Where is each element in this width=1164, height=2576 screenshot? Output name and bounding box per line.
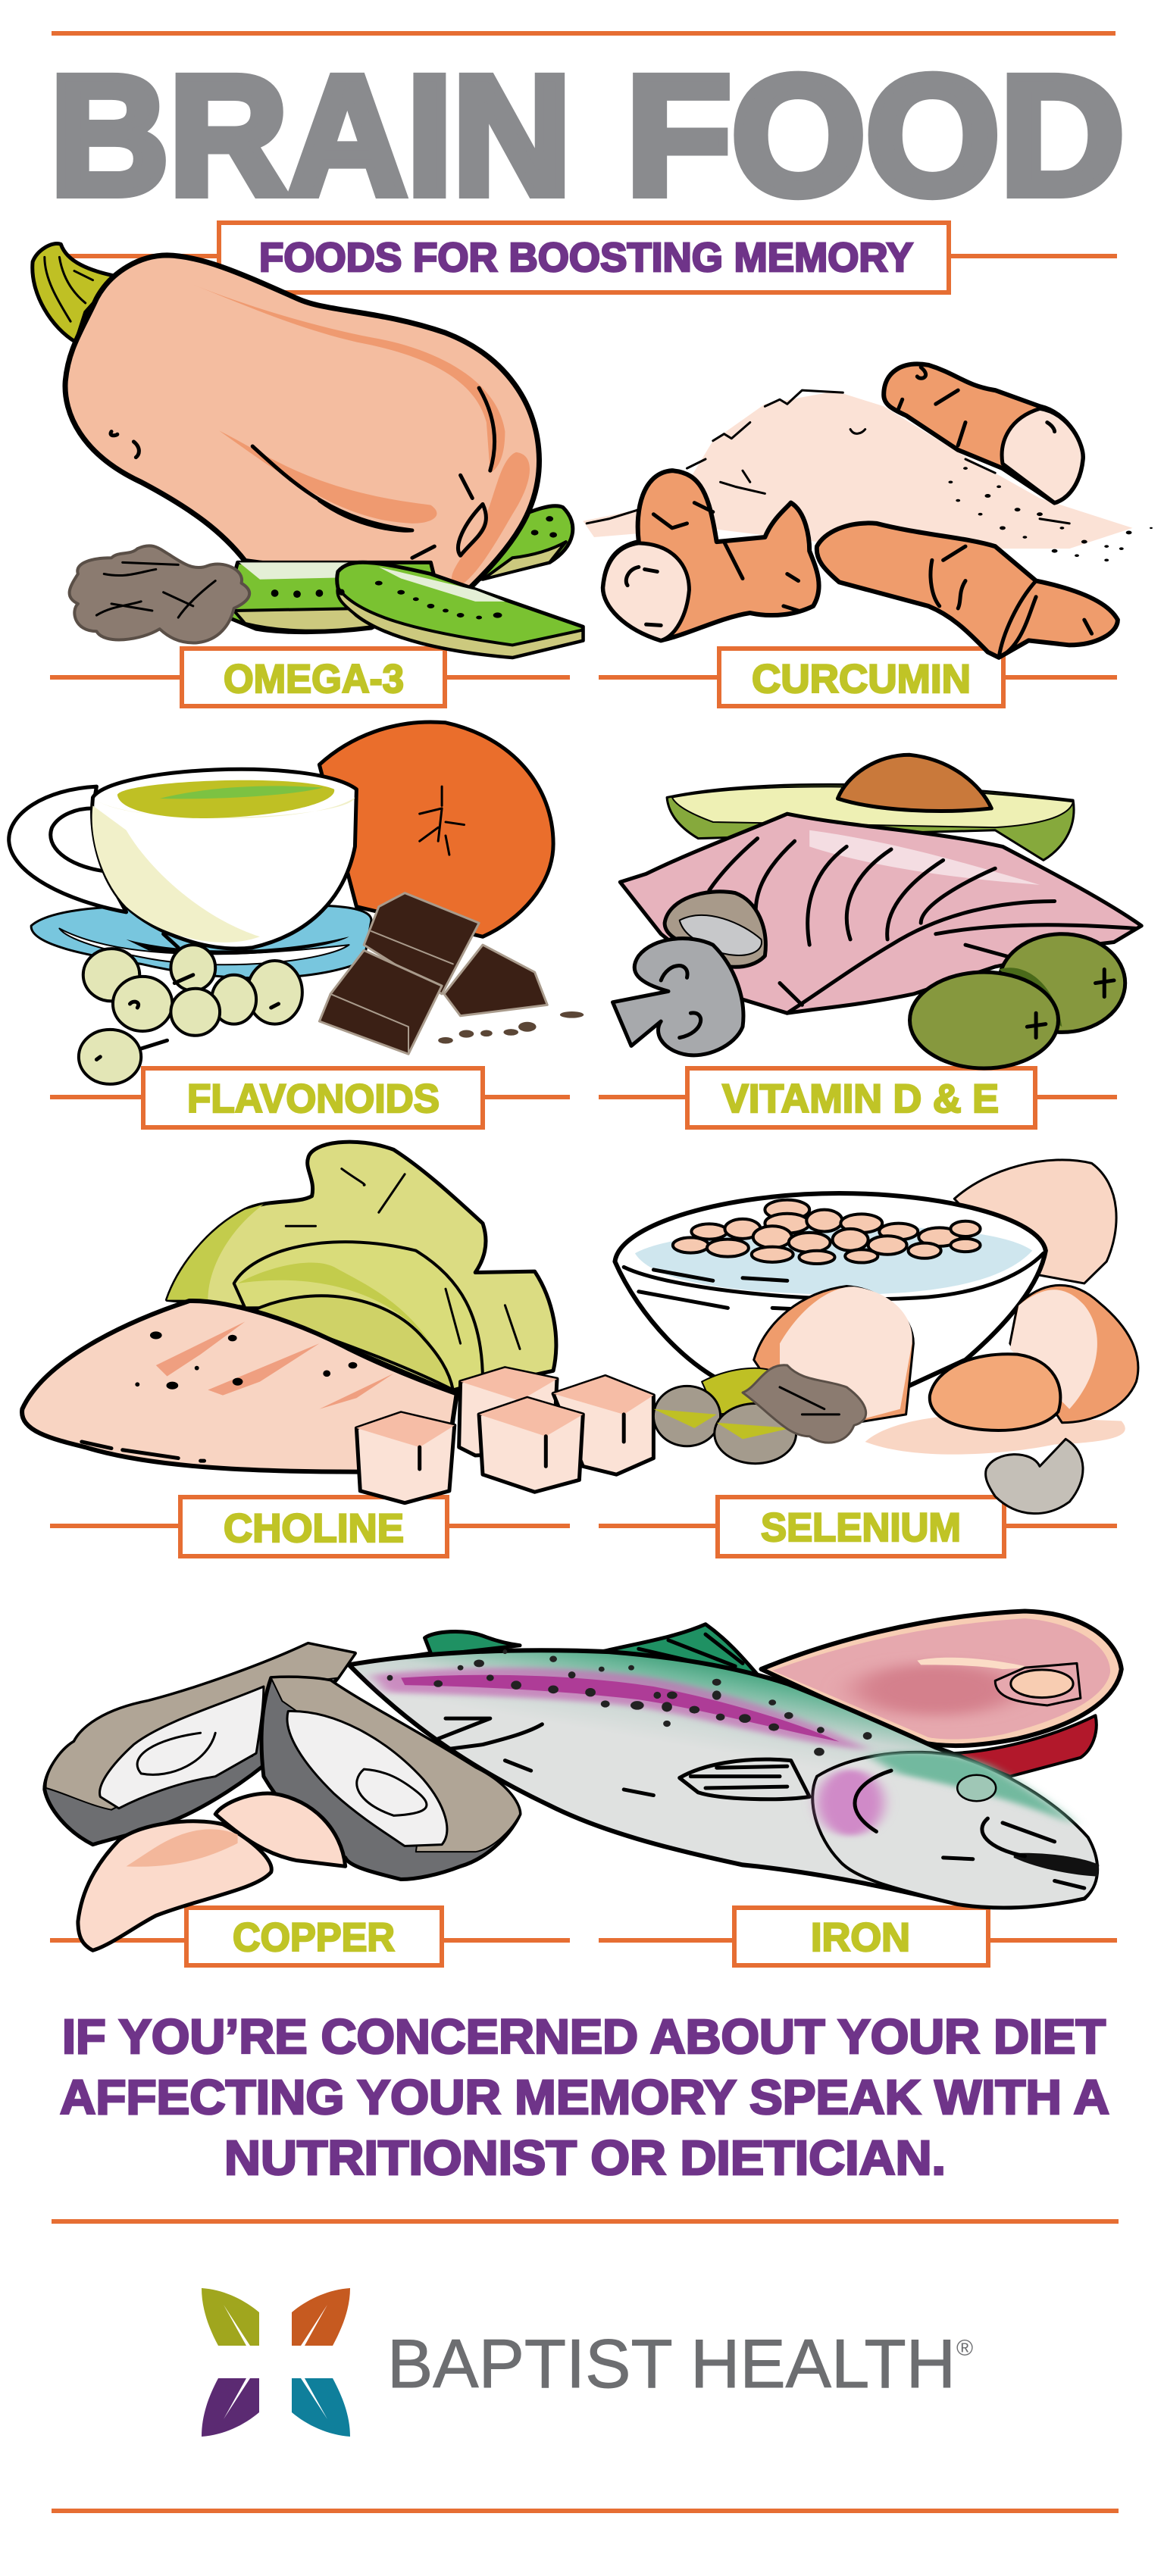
icon: avocado xyxy=(667,784,1074,860)
title: FOOD xyxy=(626,41,1125,230)
crumbs xyxy=(438,1011,584,1044)
icon: saucer xyxy=(31,905,371,978)
label: flavonoids xyxy=(50,1068,570,1127)
turmeric top cut end xyxy=(1002,408,1083,503)
top rule xyxy=(52,31,1116,36)
icon: cucumber back slice xyxy=(479,506,573,580)
label: copper xyxy=(50,1908,570,1965)
illustration: turmeric root and powder xyxy=(583,364,1153,658)
icon: squash stem xyxy=(33,244,117,342)
icon: teacup handle xyxy=(9,786,127,912)
icon: cucumber centre slice xyxy=(223,562,438,633)
icon: squash xyxy=(65,255,539,590)
icon: pistachios xyxy=(702,1368,772,1415)
label: curcumin: CURCUMIN xyxy=(752,657,971,702)
label: iron xyxy=(599,1908,1117,1965)
icon: orange xyxy=(319,722,553,936)
icon: tuna steak xyxy=(620,814,1141,1013)
icon: four leaf mark xyxy=(202,2288,350,2437)
icon: egg back xyxy=(954,1160,1116,1283)
icon: mushrooms xyxy=(665,892,765,967)
icon: shell piece back xyxy=(215,1793,346,1866)
icon: broken egg left xyxy=(754,1286,913,1425)
icon: tofu cubes xyxy=(459,1368,557,1455)
icon: ham xyxy=(761,1612,1122,1746)
beans xyxy=(673,1200,981,1264)
label: omega-3 xyxy=(50,649,570,706)
trout stripe xyxy=(371,1668,869,1750)
powder mound xyxy=(583,391,1132,549)
icon: trout body xyxy=(349,1650,1096,1908)
illustration: beans, eggs, nuts xyxy=(615,1160,1138,1514)
icon: chicken breast xyxy=(22,1301,457,1472)
icon: oyster left xyxy=(45,1643,355,1845)
turmeric left cut end xyxy=(603,543,689,640)
title xyxy=(50,41,1125,230)
subtitle banner xyxy=(68,223,1117,292)
icon: bowl xyxy=(615,1193,1046,1387)
icon: egg yolk xyxy=(930,1354,1060,1430)
logo: baptist health xyxy=(202,2288,973,2437)
illustration: ham, trout, oysters xyxy=(45,1612,1122,1950)
label: copper: COPPER xyxy=(233,1915,395,1960)
icon: cashew xyxy=(986,1439,1083,1514)
rule above logo xyxy=(52,2219,1119,2224)
logo: baptist health: ® xyxy=(956,2336,973,2361)
avocado pit xyxy=(837,755,991,811)
label: choline: CHOLINE xyxy=(224,1506,404,1551)
icon: walnut xyxy=(743,1365,866,1443)
label: vitamin d and e: VITAMIN D & E xyxy=(722,1077,999,1121)
squash shading xyxy=(193,285,505,473)
subtitle banner: FOODS FOR BOOSTING MEMORY xyxy=(259,235,913,280)
icon: egg white puddle xyxy=(865,1415,1125,1455)
closing message: IF YOU’RE CONCERNED ABOUT YOUR DIET xyxy=(62,2009,1106,2064)
trout spots xyxy=(387,1649,872,1756)
icon: shell piece front xyxy=(78,1821,271,1950)
illustration: tea, orange, grapes, chocolate xyxy=(9,722,584,1084)
label: vitamin d and e xyxy=(599,1068,1117,1127)
icon: trout dorsal fin xyxy=(602,1624,759,1677)
turmeric top piece xyxy=(884,364,1083,503)
illustration: squash, cucumber, walnut xyxy=(33,244,583,658)
label: flavonoids: FLAVONOIDS xyxy=(187,1077,440,1121)
label: selenium: SELENIUM xyxy=(761,1505,961,1550)
label: iron: IRON xyxy=(811,1915,910,1960)
icon: trout tail xyxy=(353,1632,520,1665)
turmeric left piece xyxy=(603,470,819,640)
bottom rule xyxy=(52,2509,1119,2513)
icon: chocolate xyxy=(444,945,547,1016)
icon: lettuce xyxy=(167,1142,556,1393)
icon: walnut xyxy=(70,546,249,642)
closing message: AFFECTING YOUR MEMORY SPEAK WITH A xyxy=(60,2070,1109,2124)
label: choline xyxy=(50,1497,570,1556)
illustration: avocado, tuna, mushroom, olives xyxy=(612,755,1141,1068)
icon: oyster right xyxy=(261,1677,520,1880)
illustration: lettuce, chicken, tofu xyxy=(22,1142,653,1503)
label: curcumin xyxy=(599,649,1117,706)
label: omega-3: OMEGA-3 xyxy=(224,657,404,702)
label: selenium xyxy=(599,1497,1117,1556)
icon: grapes xyxy=(79,945,302,1084)
icon: teacup xyxy=(92,769,356,949)
tea xyxy=(117,780,334,818)
icon: ham rind xyxy=(954,1715,1097,1777)
title: BRAIN xyxy=(50,41,571,230)
turmeric right piece xyxy=(817,523,1118,658)
trout pectoral fin xyxy=(680,1759,809,1799)
icon: cucumber front slice xyxy=(337,562,583,658)
icon: trout head xyxy=(812,1752,1097,1908)
closing message xyxy=(60,2009,1109,2185)
icon: broken egg right xyxy=(1010,1285,1138,1423)
closing message: NUTRITIONIST OR DIETICIAN. xyxy=(224,2131,946,2185)
wordmark: BAPTIST HEALTH xyxy=(387,2326,956,2402)
icon: olives xyxy=(999,934,1125,1032)
